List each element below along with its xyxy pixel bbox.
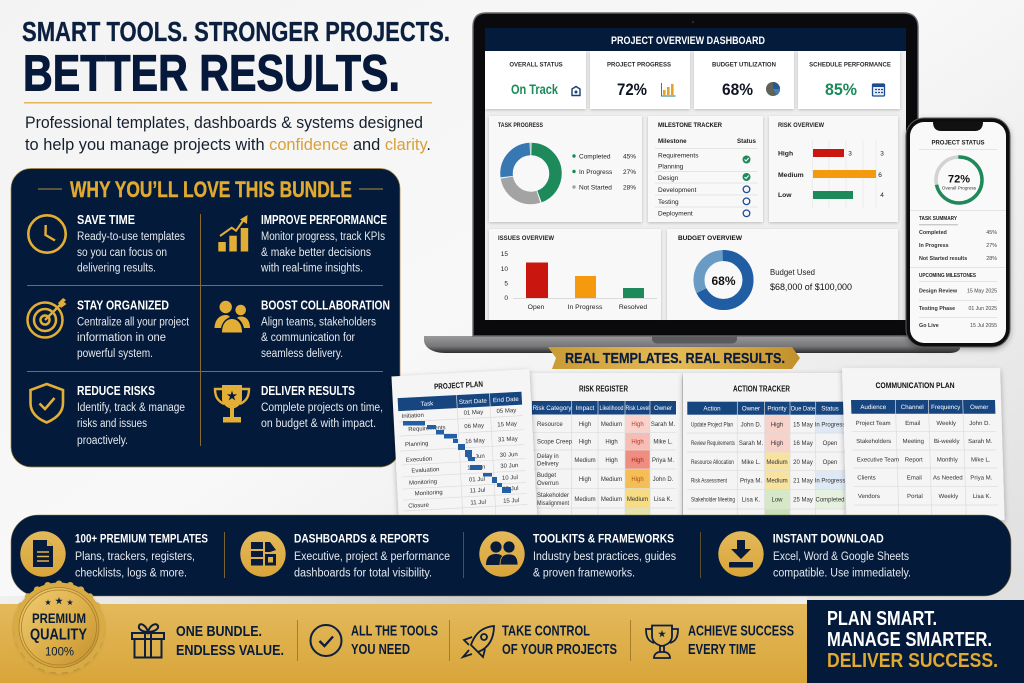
benefit: boost collaboration: seamless delivery. xyxy=(261,348,343,360)
donut chart: budget xyxy=(699,256,748,304)
phone: PROJECT STATUS xyxy=(931,141,985,147)
document: risk register: Resource xyxy=(537,422,563,428)
document: risk register: Medium xyxy=(601,477,622,483)
icon: trophy outline xyxy=(646,626,678,658)
benefit: boost collaboration xyxy=(261,298,390,360)
legend: task progress: Not Started xyxy=(579,184,612,192)
icon: trophy xyxy=(215,385,249,422)
benefit: improve performance: Monitor progress, track KPIs xyxy=(261,231,385,243)
document: risk register: Medium xyxy=(627,497,648,503)
feature: instant download: INSTANT DOWNLOAD xyxy=(773,532,884,546)
document: risk register: Misalignment xyxy=(537,501,569,507)
document: communication plan: Weekly xyxy=(939,494,958,500)
message: all the tools: ALL THE TOOLS xyxy=(351,622,438,640)
message: all the tools: YOU NEED xyxy=(351,641,410,658)
task summary: In Progress xyxy=(919,243,949,249)
document: action tracker: High xyxy=(771,422,783,428)
document: communication plan: COMMUNICATION PLAN xyxy=(875,381,955,390)
document: risk register: Stakeholder xyxy=(537,493,569,499)
benefit: deliver results: Complete projects on time, xyxy=(261,402,383,414)
feature: dashboards & reports: Executive, project & performance xyxy=(294,551,450,563)
document: risk register: High xyxy=(605,458,618,464)
document: action tracker: Low xyxy=(771,498,783,504)
task summary: TASK SUMMARY xyxy=(919,216,957,222)
benefit: boost collaboration: BOOST COLLABORATION xyxy=(261,298,390,312)
phone xyxy=(906,118,1010,347)
badge: premium quality: PREMIUM xyxy=(32,610,86,626)
card: issues overview xyxy=(489,229,661,320)
feature: toolkits & frameworks xyxy=(533,532,676,580)
legend: task progress: Completed xyxy=(579,154,611,160)
feature: toolkits & frameworks: Industry best practices, guides xyxy=(533,551,676,563)
document: action tracker: Open xyxy=(823,441,837,447)
message: achieve success xyxy=(688,622,794,658)
document: action tracker: Resource Allocation xyxy=(691,460,734,466)
card: budget overview: $68,000 of $100,000 xyxy=(770,282,852,292)
feature: dashboards & reports: dashboards for total visibility. xyxy=(294,568,432,580)
callout: plan smart: MANAGE SMARTER. xyxy=(827,629,992,651)
icon: rocket xyxy=(463,626,494,657)
card: milestone tracker: MILESTONE TRACKER xyxy=(658,122,722,129)
benefit: deliver results: DELIVER RESULTS xyxy=(261,383,355,398)
document: communication plan: Stakeholders xyxy=(856,439,891,445)
upcoming milestones: 15 May 2025 xyxy=(967,289,997,295)
document: risk register: High xyxy=(631,477,644,483)
document: action tracker: 16 May xyxy=(793,441,813,447)
ribbon: real templates xyxy=(548,347,800,369)
dashboard header: PROJECT OVERVIEW DASHBOARD xyxy=(611,35,765,47)
kpi: schedule performance: SCHEDULE PERFORMANCE xyxy=(809,62,891,68)
bar chart: issues: 15 xyxy=(501,251,508,258)
message: take control xyxy=(502,622,617,658)
benefit: stay organized: Centralize all your project xyxy=(77,317,190,329)
ring chart: overall progress xyxy=(936,157,982,203)
donut chart: task progress xyxy=(506,149,556,198)
document: project plan: 01 Jul xyxy=(469,477,485,484)
document: action tracker: Owner xyxy=(742,406,760,412)
benefit: deliver results: on budget & with impact. xyxy=(261,418,376,430)
card: milestone tracker: Planning xyxy=(658,164,684,170)
document: action tracker: Open xyxy=(823,460,837,466)
document: risk register: Medium xyxy=(574,497,596,503)
document: risk register: Delivery xyxy=(537,462,559,468)
document: project plan: End Date xyxy=(493,396,519,404)
message: take control: OF YOUR PROJECTS xyxy=(502,641,617,658)
card: risk overview xyxy=(769,116,898,222)
message: achieve success: ACHIEVE SUCCESS xyxy=(688,622,794,640)
legend: task progress: In Progress xyxy=(579,169,613,176)
feature: premium templates: Plans, trackers, registers, xyxy=(75,551,195,563)
upcoming milestones: UPCOMING MILESTONES xyxy=(919,273,976,279)
feature: premium templates xyxy=(75,532,208,580)
benefit: stay organized: STAY ORGANIZED xyxy=(77,298,169,312)
document: communication plan: Frequency xyxy=(931,404,961,411)
benefit: improve performance: IMPROVE PERFORMANCE xyxy=(261,212,387,227)
document: communication plan: As Needed xyxy=(933,476,963,481)
document: action tracker: Update Project Plan xyxy=(691,422,733,428)
card: budget overview xyxy=(667,229,898,320)
icon: dashboard xyxy=(240,531,286,577)
document: action tracker: Stakeholder Meeting xyxy=(691,498,735,504)
message: one bundle xyxy=(176,623,284,659)
document: project plan: Task xyxy=(420,400,434,408)
icon: download xyxy=(718,531,764,577)
message: take control: TAKE CONTROL xyxy=(502,622,590,640)
card: risk overview: 4 xyxy=(880,192,884,199)
document: project plan: Evaluation xyxy=(411,467,440,475)
title block xyxy=(22,16,450,154)
kpi: overall status: OVERALL STATUS xyxy=(509,62,563,68)
message: one bundle: ENDLESS VALUE. xyxy=(176,642,284,659)
document: action tracker: 20 May xyxy=(793,460,813,466)
document: action tracker: Medium xyxy=(766,478,788,484)
document: communication plan xyxy=(842,368,1005,520)
task summary: 45% xyxy=(986,230,997,236)
document: risk register: Priya M. xyxy=(652,458,674,464)
document: communication plan: Audience xyxy=(860,404,887,411)
document: risk register: High xyxy=(605,440,618,446)
card: milestone tracker: Development xyxy=(658,187,696,194)
document: action tracker: Completed xyxy=(815,498,845,504)
subtitle: Professional templates, dashboards & systems designed xyxy=(25,113,423,132)
document: project plan: 15 Jul xyxy=(503,498,519,505)
document: project plan xyxy=(391,369,537,532)
card: risk overview: Medium xyxy=(778,172,804,179)
card: milestone tracker: Design xyxy=(658,175,679,182)
document: communication plan: Email xyxy=(907,476,922,481)
badge: premium quality xyxy=(14,582,104,672)
document: action tracker: Sarah M. xyxy=(739,441,764,447)
kpi: project progress: 72% xyxy=(617,80,647,99)
document: project plan: 16 May xyxy=(465,438,485,445)
heading: better results: BETTER RESULTS. xyxy=(23,44,400,102)
document: action tracker xyxy=(683,373,847,519)
benefit: improve performance xyxy=(260,212,387,274)
document: communication plan: Vendors xyxy=(858,494,880,500)
panel: why you'll love this bundle xyxy=(11,168,400,467)
document: project plan: PROJECT PLAN xyxy=(434,380,483,391)
document: communication plan: Project Team xyxy=(856,421,891,427)
icon: rising bar chart xyxy=(218,215,248,252)
document: action tracker: ACTION TRACKER xyxy=(733,384,790,394)
card: milestone tracker: Status xyxy=(737,138,756,145)
document: risk register: Sarah M. xyxy=(651,422,676,428)
document: action tracker: Action xyxy=(703,406,721,412)
benefit: save time: so you can focus on xyxy=(77,247,167,259)
card: risk overview: Low xyxy=(778,192,792,199)
callout: plan smart: DELIVER SUCCESS. xyxy=(827,650,998,672)
legend: task progress: 45% xyxy=(623,154,636,160)
ribbon: real templates: REAL TEMPLATES. REAL RESULTS. xyxy=(565,350,785,367)
bar chart: issues: 5 xyxy=(504,280,508,288)
icon: check circle xyxy=(310,625,342,656)
feature: instant download xyxy=(773,532,911,580)
document: risk register: Delay in xyxy=(537,454,559,460)
upcoming milestones: Testing Phase xyxy=(919,306,955,312)
badge: premium quality: 100% xyxy=(45,645,74,659)
document: project plan: 11 Jul xyxy=(470,488,486,495)
kpi: overall status xyxy=(485,51,586,109)
benefit: boost collaboration: & communication for xyxy=(261,332,355,344)
benefit: stay organized xyxy=(77,298,190,360)
document: risk register: Scope Creep xyxy=(537,440,573,446)
panel heading: WHY YOU’LL LOVE THIS BUNDLE xyxy=(70,177,352,202)
card: risk overview: 6 xyxy=(878,172,882,179)
bar chart: issues: 0 xyxy=(504,295,508,302)
document: risk register xyxy=(528,373,682,519)
document: action tracker: High xyxy=(771,441,783,447)
upcoming milestones: 15 Jul 2055 xyxy=(970,323,997,329)
document: communication plan: Clients xyxy=(857,476,876,481)
feature: instant download: compatible. Use immediately. xyxy=(773,568,911,580)
benefit: deliver results xyxy=(261,383,383,430)
feature: dashboards & reports xyxy=(294,532,450,580)
document: project plan: 31 May xyxy=(498,436,518,443)
bar chart: issues: 10 xyxy=(501,266,508,273)
benefit: boost collaboration: Align teams, stakeholders xyxy=(261,317,376,329)
document: action tracker: 25 May xyxy=(793,498,813,504)
laptop base xyxy=(424,336,960,353)
document: risk register: High xyxy=(579,477,591,483)
document: risk register: Risk Level xyxy=(626,405,650,412)
document: action tracker: Lisa K. xyxy=(742,498,761,504)
document: risk register: Budget xyxy=(537,473,556,479)
message: one bundle: ONE BUNDLE. xyxy=(176,623,262,640)
document: project plan: Execution xyxy=(406,456,432,464)
document: communication plan: Lisa K. xyxy=(973,494,992,500)
card: risk overview: High xyxy=(778,151,793,158)
dashboard header xyxy=(485,28,906,51)
document: project plan: 01 Jun xyxy=(467,454,485,461)
document: communication plan: Report xyxy=(905,458,923,463)
card: milestone tracker: Testing xyxy=(658,199,679,206)
document: project plan: 10 Jul xyxy=(502,475,518,482)
document: risk register: Medium xyxy=(601,497,622,503)
document: project plan: 30 Jun xyxy=(500,452,518,459)
task summary: Not Started results xyxy=(919,256,967,262)
card: risk overview: 3 xyxy=(848,151,852,158)
card: risk overview: RISK OVERVIEW xyxy=(778,122,825,129)
document: project plan: 01 May xyxy=(464,410,483,417)
document: action tracker: Due Date xyxy=(791,406,816,412)
feature: toolkits & frameworks: & proven frameworks. xyxy=(533,568,635,580)
benefit: save time xyxy=(77,212,185,274)
document: risk register: High xyxy=(631,458,644,464)
kpi: budget utilization: 68% xyxy=(722,80,753,99)
upcoming milestones: Design Review xyxy=(919,289,958,295)
document: communication plan: Monthly xyxy=(937,458,958,463)
document: action tracker: 21 May xyxy=(793,478,813,484)
document: risk register: Mike L. xyxy=(653,440,673,446)
benefit: improve performance: & make better decisions xyxy=(261,247,371,259)
document: communication plan: John D. xyxy=(969,421,990,427)
benefit: save time: delivering results. xyxy=(77,262,156,274)
bar chart: issues: Resolved xyxy=(619,304,647,311)
upcoming milestones xyxy=(919,273,997,329)
icon: gift xyxy=(132,624,164,658)
document: communication plan: Priya M. xyxy=(970,476,993,481)
task summary: Completed xyxy=(919,230,947,236)
card: budget overview: Budget Used xyxy=(770,268,815,277)
document: risk register: High xyxy=(579,422,591,428)
document: project plan: Monitoring xyxy=(415,490,443,497)
card: task progress: TASK PROGRESS xyxy=(498,122,543,129)
document: risk register: Medium xyxy=(601,422,622,428)
kpi: project progress xyxy=(590,51,690,109)
icon: shield xyxy=(30,384,63,422)
document: communication plan: Bi-weekly xyxy=(934,439,960,445)
gantt bars xyxy=(403,421,511,493)
kpi: schedule performance: 85% xyxy=(825,80,857,99)
icon: target xyxy=(28,298,66,338)
document: risk register: Risk Category xyxy=(533,405,572,412)
document: communication plan: Channel xyxy=(901,404,924,411)
card: risk overview: 3 xyxy=(880,151,884,158)
benefit: stay organized: information in one xyxy=(77,332,166,344)
document: communication plan: Executive Team xyxy=(857,458,899,463)
document: risk register: Overrun xyxy=(537,481,559,487)
document: risk register: Lisa K. xyxy=(654,497,673,503)
document: project plan: Start Date xyxy=(459,397,488,406)
ring chart: overall progress: Overall Progress xyxy=(942,186,977,190)
document: project plan: Initiation xyxy=(401,413,424,420)
document: action tracker: Review Requirements xyxy=(691,441,735,447)
kpi: budget utilization: BUDGET UTILIZATION xyxy=(712,62,776,68)
feature: instant download: Excel, Word & Google Sheets xyxy=(773,551,909,563)
document: project plan: 06 May xyxy=(464,423,484,430)
callout: plan smart xyxy=(807,600,1024,683)
status icons xyxy=(742,156,750,217)
document: action tracker: Status xyxy=(821,406,839,412)
document: communication plan: Mike L. xyxy=(971,458,991,463)
callout: plan smart: PLAN SMART. xyxy=(827,608,937,630)
donut chart: budget: 68% xyxy=(711,274,736,288)
document: risk register: Owner xyxy=(654,405,672,412)
laptop xyxy=(424,13,960,353)
document: project plan: 30 Jun xyxy=(500,463,518,470)
card: milestone tracker xyxy=(648,116,763,222)
feature: premium templates: 100+ PREMIUM TEMPLATES xyxy=(75,532,208,546)
document: risk register: RISK REGISTER xyxy=(579,384,628,394)
document: risk register: High xyxy=(631,440,644,446)
document: communication plan: Weekly xyxy=(936,421,956,427)
heading: smart tools: SMART TOOLS. STRONGER PROJECTS. xyxy=(22,16,450,47)
benefit: stay organized: powerful system. xyxy=(77,348,153,360)
message: all the tools xyxy=(351,622,438,658)
legend: task progress: 27% xyxy=(623,169,636,176)
document: communication plan: Portal xyxy=(907,494,923,500)
document: action tracker: Priya M. xyxy=(740,478,762,484)
bottom bar: bundle contents xyxy=(0,515,1011,605)
kpi: schedule performance xyxy=(798,51,900,109)
task summary xyxy=(919,216,997,262)
title block: to help you manage projects with confidence and clarity. xyxy=(25,135,431,154)
document: project plan: Planning xyxy=(405,441,429,448)
card: milestone tracker: Milestone xyxy=(658,138,687,145)
card: milestone tracker: Deployment xyxy=(658,210,693,218)
card: budget overview: BUDGET OVERVIEW xyxy=(678,235,743,242)
task summary: 27% xyxy=(986,243,997,249)
document: project plan: 15 Jul xyxy=(502,486,519,493)
document: communication plan: Owner xyxy=(970,404,988,411)
gold strip xyxy=(0,604,807,683)
document: risk register: John D. xyxy=(653,477,674,483)
benefit: improve performance: with real-time insights. xyxy=(260,262,363,274)
benefit: save time: SAVE TIME xyxy=(77,212,135,227)
laptop lid xyxy=(473,13,918,336)
bar chart: issues: Open xyxy=(528,304,545,311)
document: action tracker: Mike L. xyxy=(741,460,761,466)
benefit: reduce risks: risks and issues xyxy=(77,418,147,430)
document: risk register: Medium xyxy=(574,458,596,464)
document: risk register: Likelihood xyxy=(600,405,624,412)
feature: premium templates: checklists, logs & more. xyxy=(75,568,187,580)
upcoming milestones: 01 Jun 2025 xyxy=(968,306,997,312)
legend: task progress xyxy=(572,154,636,192)
document: risk register: Impact xyxy=(576,405,595,412)
document: action tracker: 15 May xyxy=(793,422,813,428)
document: communication plan: Meeting xyxy=(903,439,924,445)
feature: toolkits & frameworks: TOOLKITS & FRAMEWORKS xyxy=(533,532,674,546)
document: project plan: Monitoring xyxy=(409,479,437,487)
kpi: project progress: PROJECT PROGRESS xyxy=(607,62,671,68)
document: action tracker: Risk Assessment xyxy=(691,478,727,484)
icon: team xyxy=(214,301,250,332)
document: project plan: 15 May xyxy=(497,421,517,428)
document: action tracker: Priority xyxy=(767,406,788,412)
document: action tracker: John D. xyxy=(741,422,762,428)
upcoming milestones: Go Live xyxy=(919,323,939,329)
document: action tracker: In Progress xyxy=(815,478,845,484)
document: project plan: Closure xyxy=(408,503,430,510)
task summary: 28% xyxy=(986,256,997,262)
card: issues overview: ISSUES OVERVIEW xyxy=(498,235,555,242)
icon: clock xyxy=(28,215,66,253)
icon: document xyxy=(20,531,66,577)
legend: task progress: 28% xyxy=(623,184,636,192)
document: action tracker: In Progress xyxy=(815,422,845,428)
document: project plan: 05 May xyxy=(496,408,516,415)
document: project plan: Requirements xyxy=(408,425,446,433)
bar chart: issues xyxy=(501,251,657,311)
bar chart: issues: In Progress xyxy=(568,304,603,311)
document: communication plan: Sarah M. xyxy=(968,439,993,445)
badge: premium quality: QUALITY xyxy=(30,626,87,644)
benefit: reduce risks: Identify, track & manage xyxy=(77,402,185,414)
icon: people xyxy=(479,531,525,577)
benefit: save time: Ready-to-use templates xyxy=(77,231,185,243)
feature: dashboards & reports: DASHBOARDS & REPORTS xyxy=(294,532,429,546)
benefit: reduce risks: proactively. xyxy=(77,435,128,447)
benefit: reduce risks xyxy=(77,383,185,447)
card: task progress xyxy=(489,116,642,222)
card: milestone tracker: Requirements xyxy=(658,152,699,160)
document: project plan: 16 Jun xyxy=(467,465,486,472)
kpi: budget utilization xyxy=(694,51,794,109)
document: project plan: 11 Jul xyxy=(470,500,486,507)
document: risk register: High xyxy=(631,422,644,428)
message: achieve success: EVERY TIME xyxy=(688,641,756,658)
document: action tracker: Medium xyxy=(766,460,788,466)
document: communication plan: Email xyxy=(905,421,920,427)
benefit: reduce risks: REDUCE RISKS xyxy=(77,383,155,398)
kpi: overall status: On Track xyxy=(511,81,558,97)
document: risk register: High xyxy=(579,440,591,446)
ring chart: overall progress: 72% xyxy=(948,174,970,186)
